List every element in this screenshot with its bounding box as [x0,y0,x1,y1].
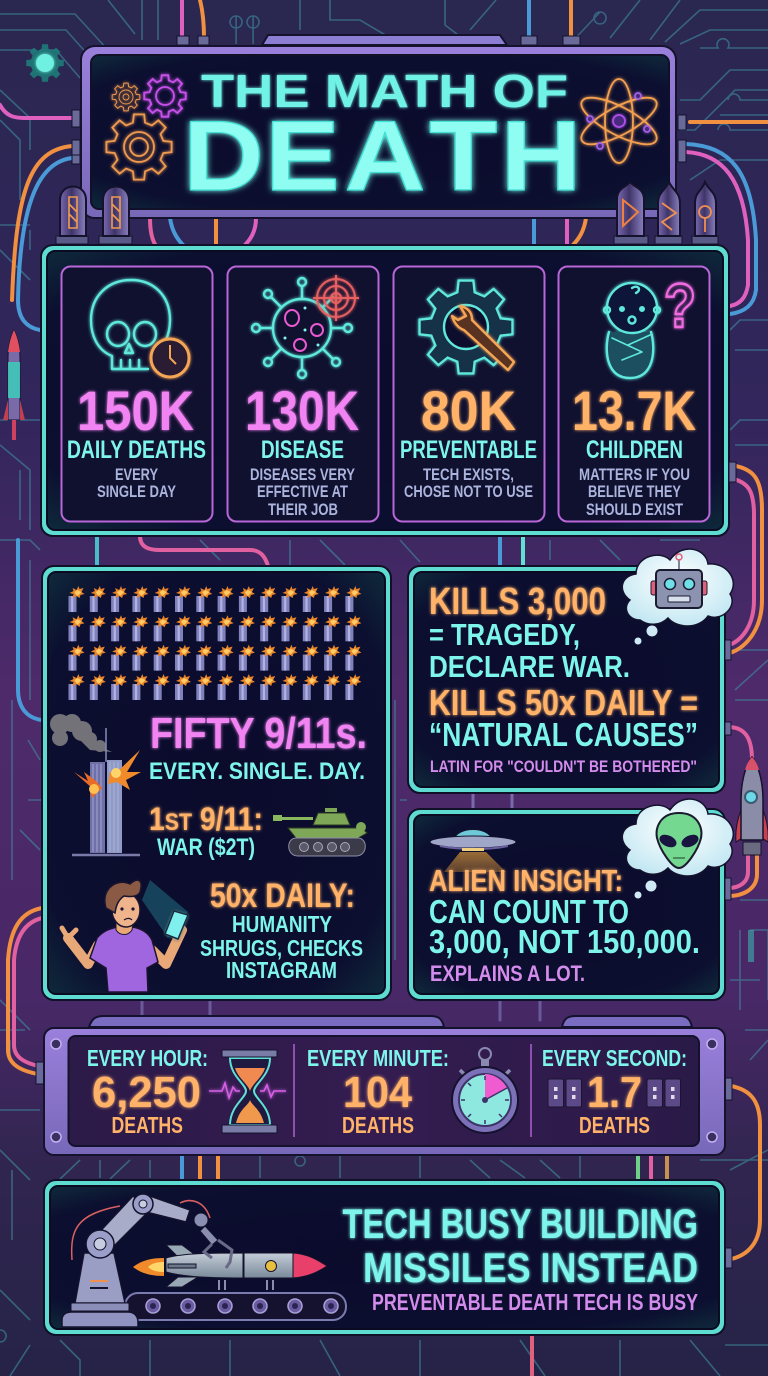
card: disease [228,266,378,522]
alien body text: 3,000, NOT 150,000. [429,923,700,960]
card: children [558,266,710,522]
alien insight heading: ALIEN INSIGHT: [429,863,623,898]
stat note: THEIR JOB [268,501,338,519]
tube 4 [655,182,682,244]
every hour block: 6,250 [92,1068,201,1117]
icon: skull with clock [91,280,189,377]
alien body text [429,893,700,960]
tabs above time bar [89,1016,692,1027]
thought cloud: alien [622,799,733,898]
stat note: EFFECTIVE AT [257,483,348,501]
stat value: 150K [77,379,194,442]
panel: time bar [44,1028,725,1155]
illustration: twin towers on fire [50,714,141,855]
humanity shrugs text: HUMANITY [232,911,332,937]
every second block: 1.7 [587,1068,642,1117]
stat label: PREVENTABLE [400,436,537,464]
divider [530,1044,532,1137]
humanity shrugs text: SHRUGS, CHECKS [200,935,363,961]
icon grid: fifty burning towers [68,586,361,700]
header panel [81,35,676,218]
title: death: DEATH [183,101,581,212]
every hour block: EVERY HOUR: [87,1045,208,1071]
every minute block: EVERY MINUTE: [307,1045,449,1071]
stat label: CHILDREN [586,436,683,464]
war cost: WAR ($2T) [157,834,255,861]
tube 5 [692,182,718,244]
stat note: BELIEVE THEY [588,483,681,501]
every second block [542,1045,687,1138]
panel: stats [41,245,729,536]
icon: large orange gear [106,114,172,180]
icon: gear with wrench [420,281,514,373]
panel: alien insight [408,799,733,1000]
every second block: EVERY SECOND: [542,1045,687,1071]
every hour block: DEATHS [112,1112,183,1138]
humanity shrugs text: INSTAGRAM [226,957,337,983]
connectors on header [72,36,686,164]
icon: small orange gear [112,83,140,111]
tragedy text: = TRAGEDY, [429,617,580,652]
stat note [404,466,533,501]
icon: alien head [657,813,701,868]
icon: stopwatch [452,1048,518,1133]
headline [342,1200,698,1291]
stat note: TECH EXISTS, [423,466,514,484]
stat note: SHOULD EXIST [586,501,683,519]
stat note [579,466,690,519]
illustration: shrugging person with phone [62,880,188,992]
glowing gear node [26,44,64,82]
icon: flip digits [548,1079,680,1107]
stat note: MATTERS IF YOU [579,466,690,484]
icon: ufo [430,830,516,872]
stat note: EVERY [115,466,158,484]
stat note [97,466,176,501]
connectors on lower panels [36,462,736,1268]
icon: purple gear [144,75,186,117]
tragedy text [429,617,630,684]
fifty times daily label: 50x DAILY: [210,877,355,915]
stat note: SINGLE DAY [97,483,176,501]
every minute block [307,1045,449,1138]
subheadline: EVERY. SINGLE. DAY. [149,758,365,785]
every hour block [87,1045,208,1138]
natural causes line: “NATURAL CAUSES” [429,716,698,753]
stat note: CHOSE NOT TO USE [404,483,533,501]
humanity shrugs text [200,911,363,983]
every second block: DEATHS [579,1112,650,1138]
headline: FIFTY 9/11s. [150,709,367,758]
every minute block: DEATHS [342,1112,414,1138]
tube 3 [614,182,648,244]
illustration: robot arm [62,1194,232,1327]
stat note [250,466,355,519]
stat label: DISEASE [261,436,344,464]
kills 3,000 line: KILLS 3,000 [429,581,606,623]
card: daily deaths [62,266,212,522]
alien body text: CAN COUNT TO [429,893,629,930]
panel: tech busy building missiles [44,1180,725,1335]
rocket on right wires [736,757,768,855]
illustration: conveyor belt [125,1293,346,1320]
icon: atom [575,79,663,163]
tragedy text: DECLARE WAR. [429,649,630,684]
icon: swaddled baby [604,283,660,378]
icon: tank [273,808,367,856]
every minute block: 104 [343,1068,412,1117]
panel: kills 3,000 [408,549,733,793]
thought cloud: robot [622,549,733,644]
icon: question mark: ? [664,272,696,341]
stat note: DISEASES VERY [250,466,355,484]
stat value: 130K [245,379,359,442]
stat label: DAILY DEATHS [67,436,206,464]
stat value: 80K [421,379,516,442]
headline: MISSILES INSTEAD [363,1244,698,1291]
stat value: 13.7K [572,379,696,442]
panel screws [51,1039,717,1142]
latin footnote: LATIN FOR "COULDN'T BE BOTHERED" [430,757,697,776]
tube 1 [56,186,88,244]
icon: virus with target [252,275,359,378]
icon: robot [651,554,707,608]
explains a lot: EXPLAINS A LOT. [430,961,585,986]
panel: fifty 9/11s [42,566,391,1000]
illustration: missile [133,1245,327,1290]
tube 2 [99,186,132,244]
nixie tubes [56,182,718,244]
icon: hourglass [209,1050,286,1133]
divider [293,1044,295,1137]
card: preventable [394,266,544,522]
kills 50x daily line: KILLS 50x DAILY = [429,682,698,723]
first 9/11 label: 1ST 9/11: [149,801,263,837]
title: the math of: THE MATH OF [201,65,568,117]
side rocket [3,330,25,440]
